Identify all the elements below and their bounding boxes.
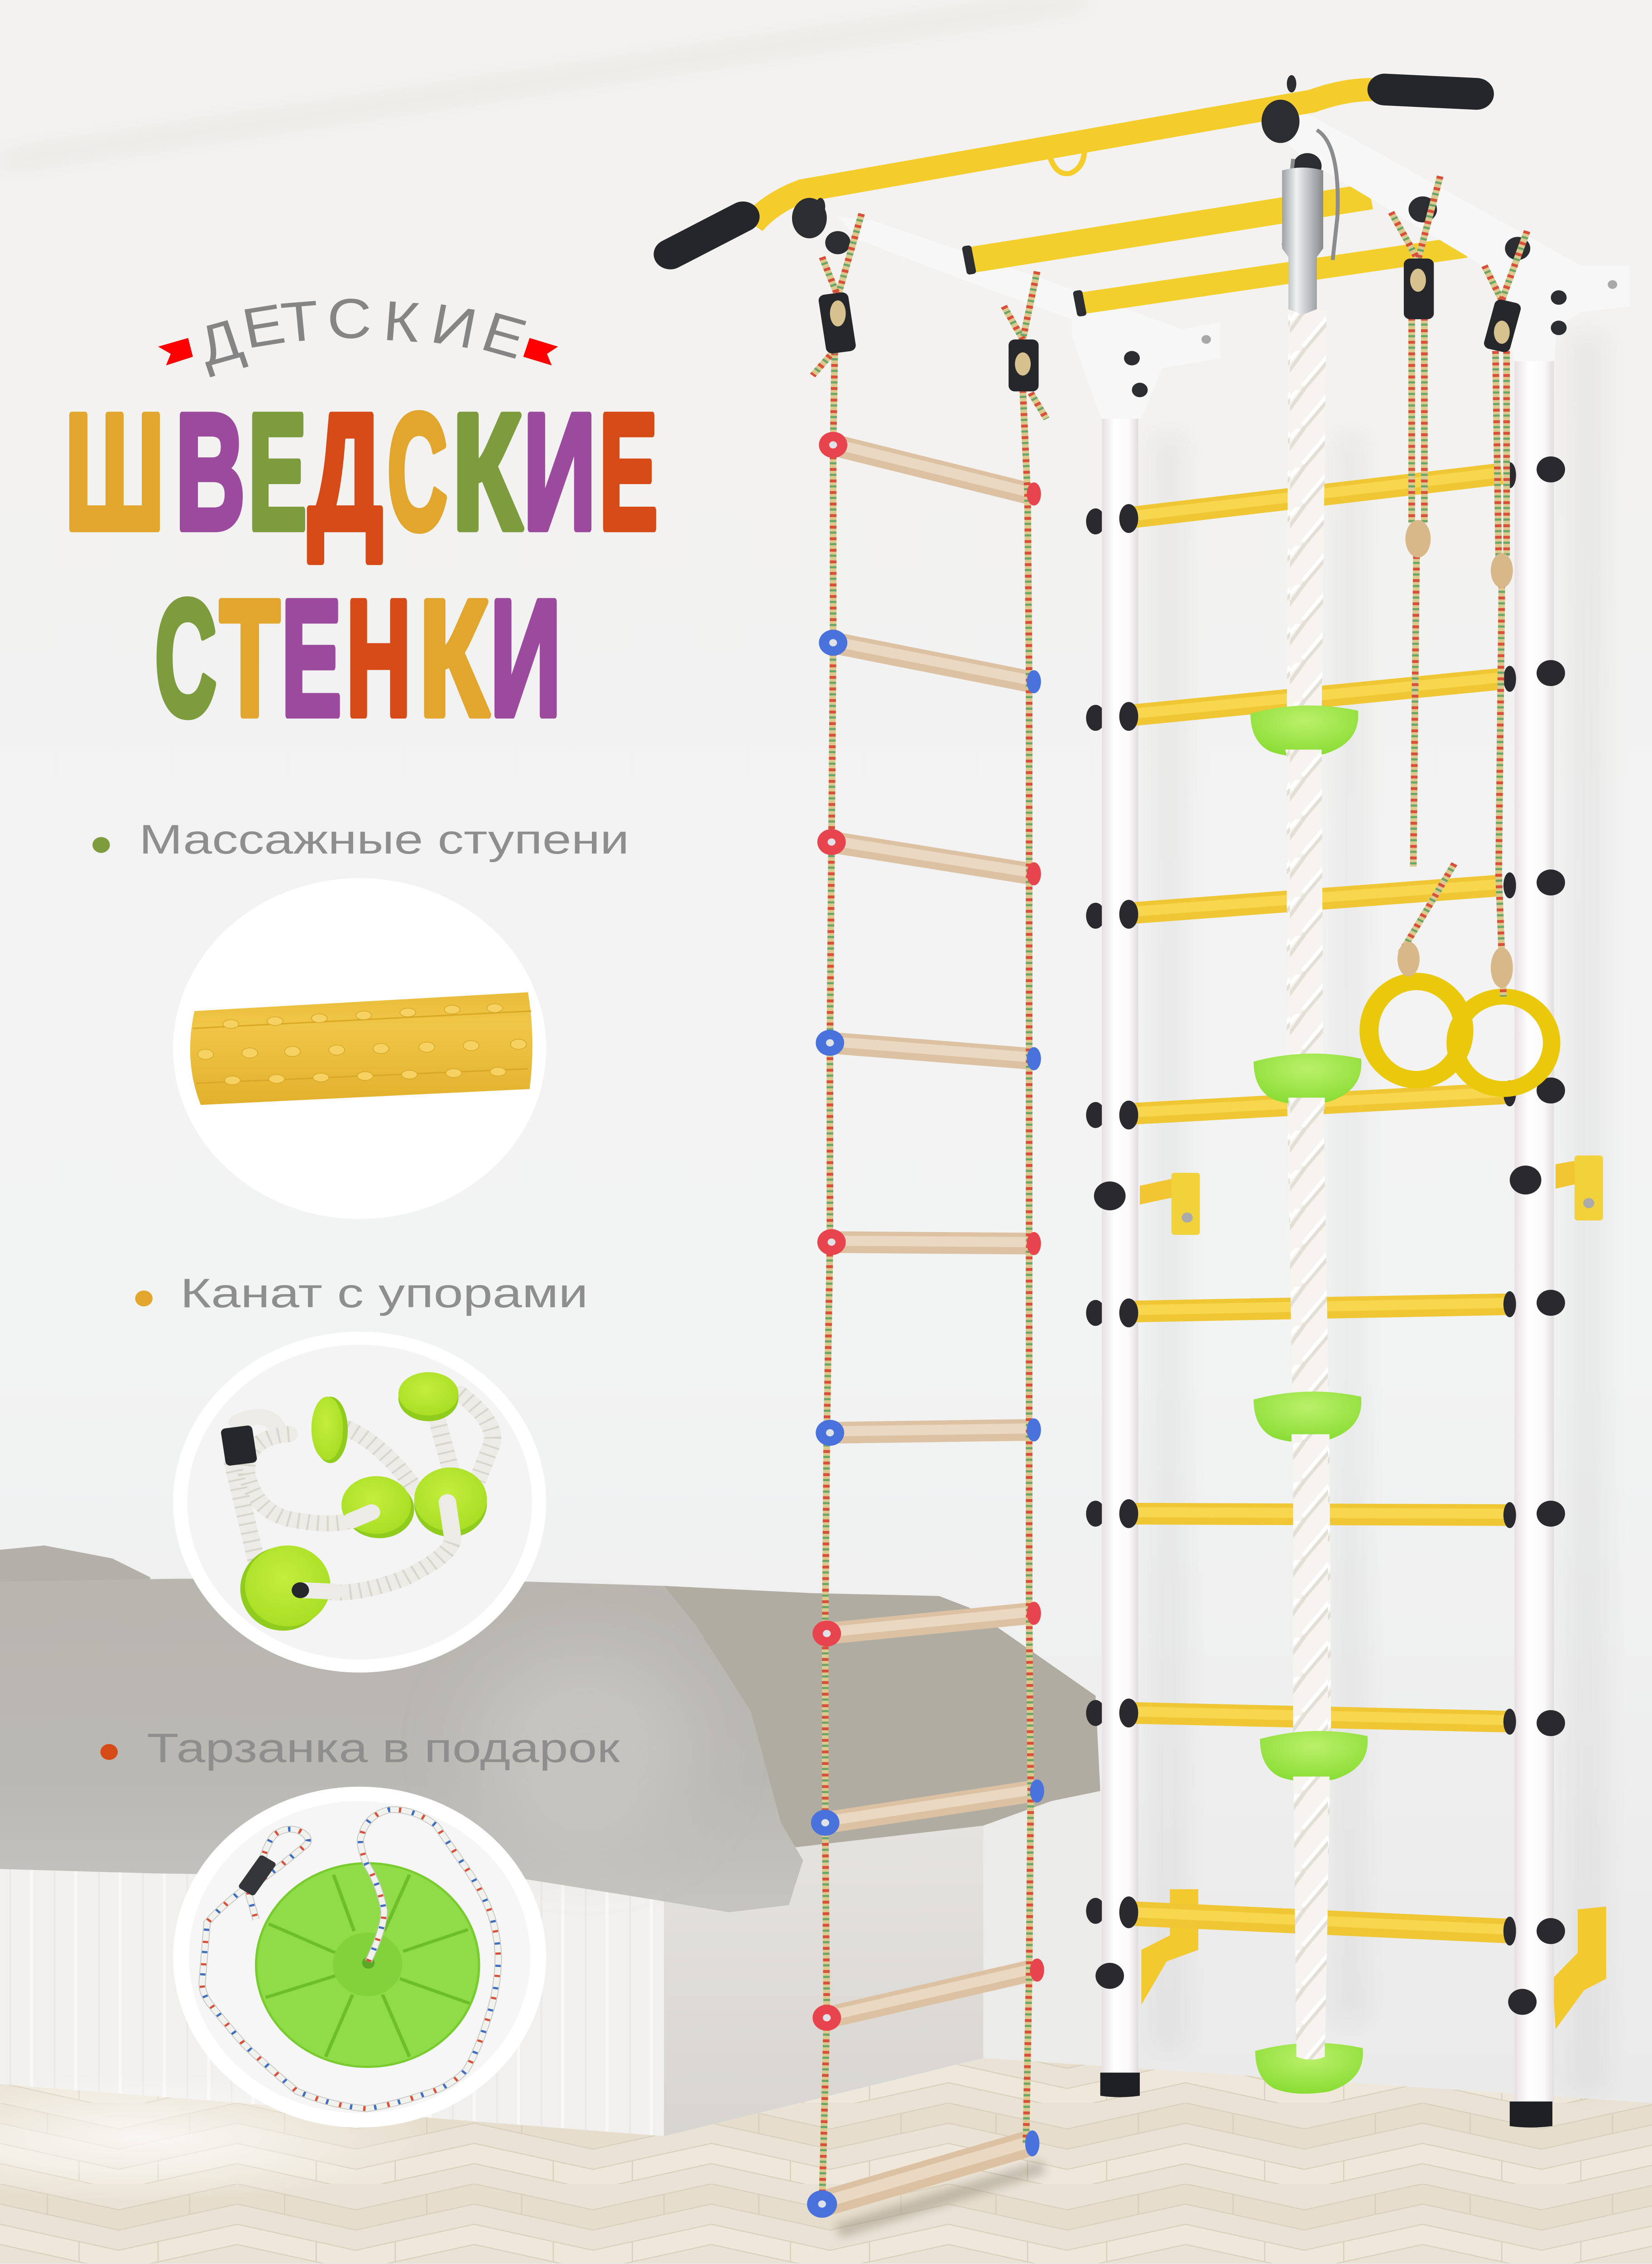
gymnastic rings <box>1369 981 1551 1089</box>
heading: ШВЕДСКИЕ: Ш <box>65 379 164 564</box>
lime disc <box>245 1545 331 1626</box>
disc spokes <box>265 1875 470 2057</box>
heading: ШВЕДСКИЕ: Е <box>248 379 307 564</box>
stop 4 <box>1260 1731 1368 1782</box>
rope with discs <box>221 1372 493 1631</box>
lime disc <box>341 1476 411 1534</box>
heading: СТЕНКИ: Т <box>220 566 280 750</box>
black caps on arms <box>792 75 1566 397</box>
lime disc <box>312 1397 343 1460</box>
right arm <box>1288 110 1630 361</box>
floor light glow <box>0 2072 442 2202</box>
stop 2 <box>1253 1054 1361 1104</box>
bullet red <box>101 1744 118 1760</box>
twisted rope <box>1287 311 1331 2058</box>
heading: ШВЕДСКИЕ: К <box>452 379 523 564</box>
left upright <box>1102 361 1138 2074</box>
last rope end over stop <box>1297 2029 1325 2060</box>
inner circle <box>187 1345 532 1660</box>
bed <box>0 1545 1102 2136</box>
left black grip <box>670 216 743 254</box>
duvet rear drape <box>664 1586 1100 1849</box>
heading: СТЕНКИ: Е <box>281 566 341 750</box>
right wall bracket <box>1556 1156 1603 1220</box>
top grip bar <box>753 90 1372 224</box>
bullet orange <box>135 1290 153 1306</box>
rope knots <box>1397 520 1513 988</box>
right bottom wall bracket <box>1552 1907 1606 2029</box>
green disc seat <box>256 1863 479 2067</box>
wooden rungs <box>822 443 1034 2204</box>
left arm <box>838 216 1220 419</box>
label: Тарзанка в подарок <box>147 1725 620 1771</box>
black rope clip <box>238 1854 277 1896</box>
cross bar front end ring <box>1073 290 1087 317</box>
black clamp <box>221 1425 257 1466</box>
feature 2: rope with stops <box>135 1271 588 1673</box>
cross bar front <box>1081 247 1465 303</box>
pillow <box>0 1545 150 1589</box>
heading: ШВЕДСКИЕ: И <box>523 379 596 564</box>
subtitle: ДЕТСКИЕ: Т <box>279 288 322 355</box>
subtitle: ДЕТСКИЕ <box>190 287 534 378</box>
feature 3: disc swing gift <box>101 1725 620 2128</box>
left bottom wall bracket <box>1141 1889 1198 2005</box>
heading: СТЕНКИ <box>155 566 561 750</box>
wall bars structure <box>670 75 1630 2128</box>
wall section behind bed <box>983 1791 1102 2065</box>
text: Е <box>599 379 658 564</box>
stop 5 <box>1255 2043 1363 2094</box>
left wall bracket <box>1140 1173 1200 1235</box>
subtitle: ДЕТСКИЕ: И <box>427 292 482 360</box>
ring left <box>1369 981 1464 1079</box>
cross bar rear <box>970 197 1371 260</box>
carabiner <box>1284 130 1338 260</box>
plate bolts <box>1201 335 1211 344</box>
metal sleeve <box>1282 168 1323 315</box>
subtitle: ДЕТСКИЕ: Е <box>475 300 534 371</box>
ring right <box>1455 997 1551 1089</box>
rope segments over stops <box>1285 750 1330 1788</box>
stop 3 <box>1253 1391 1361 1442</box>
far-side left bolts <box>1086 508 1105 1924</box>
label: Массажные ступени <box>139 817 629 863</box>
left red ribbon <box>158 338 193 365</box>
lime disc <box>414 1468 487 1531</box>
yellow rungs <box>1135 472 1510 1931</box>
plate bolt right <box>1608 280 1617 289</box>
heading: ШВЕДСКИЕ: С <box>387 379 447 564</box>
heading: СТЕНКИ: Н <box>346 566 411 750</box>
heading: СТЕНКИ: И <box>490 566 561 750</box>
black bushing on large disc <box>292 1582 309 1598</box>
climbing rope with stops <box>1250 130 1368 2094</box>
title <box>65 287 658 750</box>
right red ribbon <box>523 338 558 365</box>
left upright foot <box>1100 2072 1140 2097</box>
rope strands <box>812 176 1527 2204</box>
subtitle: ДЕТСКИЕ: Д <box>190 307 250 378</box>
hub hole <box>362 1957 375 1969</box>
ladder floor shadow <box>838 2167 1043 2231</box>
inner circle <box>189 1801 530 2113</box>
heading: ШВЕДСКИЕ: В <box>175 379 245 564</box>
white ring circle <box>173 1787 546 2128</box>
right black grip <box>1385 90 1477 94</box>
top bar D ring <box>1050 149 1085 174</box>
heading: СТЕНКИ: К <box>419 566 490 750</box>
tensioner inner rope <box>830 269 1510 375</box>
wooden rope ladder <box>807 176 1527 2218</box>
subtitle: ДЕТСКИЕ: С <box>327 287 372 350</box>
swing rope <box>202 1810 498 2109</box>
rope ends entering discs <box>303 1502 452 1592</box>
feature 1: massage steps <box>92 817 629 1219</box>
bullet green <box>92 837 110 853</box>
rung caps <box>807 432 1044 2218</box>
soft wall and floor shadows <box>1151 332 1606 2094</box>
ceiling line <box>0 0 1086 162</box>
white ring circle <box>173 1332 546 1673</box>
right upright <box>1514 296 1554 2105</box>
bed front panel <box>0 1856 664 2136</box>
heading: ШВЕДСКИЕ: Д <box>308 379 383 564</box>
duvet fold highlight <box>474 1646 696 1849</box>
rope tensioners <box>818 259 1522 391</box>
lime disc shaded edges <box>240 1375 487 1631</box>
lime disc <box>399 1372 458 1415</box>
label: Канат с упорами <box>180 1271 588 1316</box>
bed side panel <box>661 1805 983 2136</box>
heading: ШВЕДСКИЕ <box>65 379 658 564</box>
subtitle: ДЕТСКИЕ: К <box>381 289 422 354</box>
cross bar rear end ring <box>962 245 976 275</box>
stop 1 <box>1250 705 1358 756</box>
hub <box>333 1933 402 1996</box>
right upright foot <box>1510 2101 1552 2128</box>
massage tube <box>190 992 533 1105</box>
parquet floor <box>0 2058 1652 2263</box>
duvet <box>0 1578 803 1912</box>
heading: СТЕНКИ: С <box>155 566 216 750</box>
white circle <box>173 878 546 1219</box>
subtitle: ДЕТСКИЕ: Е <box>237 292 290 360</box>
rung end caps and bolts <box>1094 456 1565 2015</box>
